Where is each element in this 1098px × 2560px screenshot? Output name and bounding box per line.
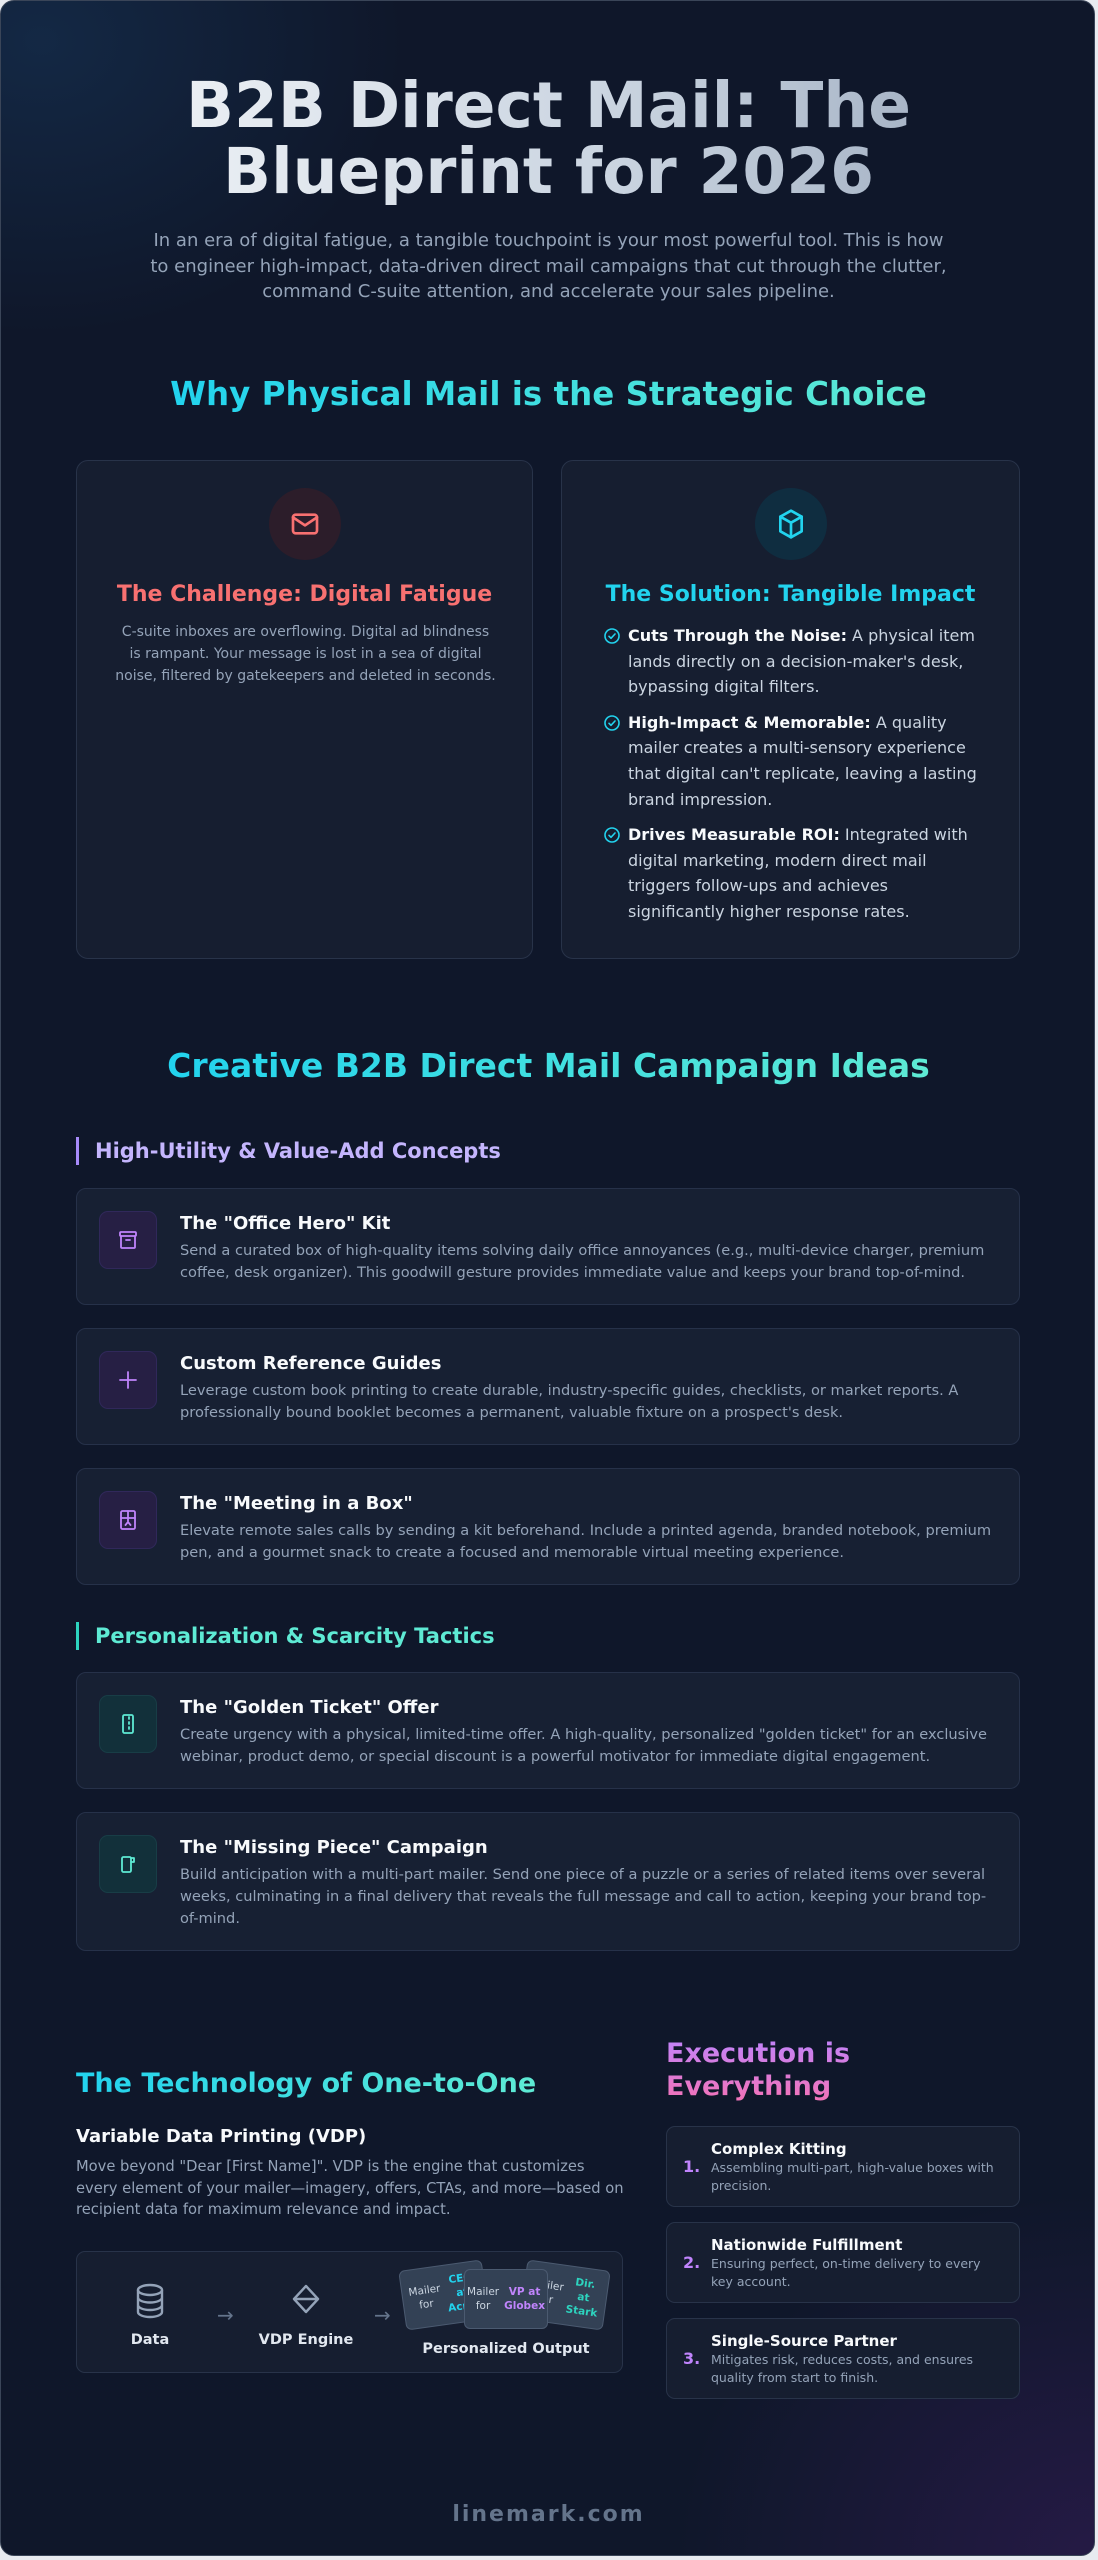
- solution title: The Solution: Tangible Impact: [606, 582, 975, 607]
- vdp text: every element of your mailer—imagery, offers, CTAs, and more—based on: [76, 2180, 624, 2196]
- execution card 2: Nationwide Fulfillment: [711, 2236, 902, 2254]
- item: roi: triggers follow-ups and achieves: [628, 876, 888, 895]
- execution card 1: Complex Kitting: [711, 2140, 847, 2158]
- mailer card: stark: for: [538, 2292, 554, 2306]
- label: data: Data: [131, 2332, 169, 2348]
- solution list: [604, 626, 977, 921]
- execution card 2: Ensuring perfect, on-time delivery to every key account.: [711, 2256, 981, 2289]
- challenge text: [115, 624, 496, 684]
- mailer card: globex: for: [476, 2300, 490, 2312]
- card: golden ticket: Create urgency with a physical, limited-time offer. A high-quality, personalized "golden ticket" for an exclusive webinar, product demo, or special discount is a powerful motivator for immediate digital engagement.: [180, 1726, 987, 1765]
- card: office hero: [76, 1188, 1020, 1305]
- execution card 3: [666, 2318, 1020, 2399]
- heading: creative ideas: Creative B2B Direct Mail Campaign Ideas: [167, 1046, 930, 1085]
- card: missing piece: [76, 1812, 1020, 1951]
- arrow 2: →: [374, 2303, 391, 2327]
- mailer card: stark: Mailer: [531, 2277, 564, 2294]
- icon: ticket: [99, 1695, 157, 1753]
- title: B2B Direct Mail: The: [186, 69, 911, 142]
- icon: cube: [755, 488, 827, 560]
- mailer card: acme: [398, 2259, 490, 2331]
- mailer card: globex: Mailer: [467, 2286, 499, 2298]
- card: reference guides: Leverage custom book printing to create durable, industry-specific guides, checklists, or market reports. A professionally bound booklet becomes a permanent, valuable fixture on a prospect's desk.: [180, 1382, 958, 1421]
- execution card 1: 1.: [683, 2157, 700, 2176]
- mailer card: stark: [519, 2259, 611, 2331]
- item: roi: Drives Measurable ROI: Integrated with: [628, 825, 968, 844]
- item: roi: digital marketing, modern direct mail: [628, 851, 927, 870]
- item: high impact: brand impression.: [628, 790, 772, 809]
- mailer card: acme: at: [456, 2286, 469, 2299]
- challenge title: The Challenge: Digital Fatigue: [117, 582, 492, 607]
- title: [1, 73, 1096, 205]
- subtitle: to engineer high-impact, data-driven direct mail campaigns that cut through the clutter,: [150, 256, 947, 276]
- label: personalized output: Personalized Output: [422, 2341, 590, 2357]
- icon: database: [136, 2284, 164, 2318]
- card: meeting in a box: [76, 1468, 1020, 1585]
- mailer card: globex: VP at: [509, 2286, 540, 2298]
- icon: plus: [99, 1351, 157, 1409]
- mailer card: globex: [464, 2269, 548, 2329]
- challenge text: is rampant. Your message is lost in a sea of digital: [130, 646, 482, 662]
- panel: solution: [561, 460, 1020, 959]
- icon: envelope: [269, 488, 341, 560]
- subtitle: In an era of digital fatigue, a tangible touchpoint is your most powerful tool. This is how: [153, 230, 944, 251]
- vdp text: Move beyond "Dear [First Name]". VDP is the engine that customizes: [76, 2158, 585, 2175]
- subheading: high utility: High-Utility & Value-Add Concepts: [95, 1139, 501, 1163]
- mailer card: acme: for: [418, 2298, 434, 2311]
- item: cuts through noise: [604, 626, 975, 696]
- card: office hero: The "Office Hero" Kit: [180, 1213, 390, 1234]
- subtitle: command C-suite attention, and accelerate your sales pipeline.: [262, 281, 835, 302]
- card: meeting in a box: The "Meeting in a Box": [180, 1493, 413, 1514]
- card: office hero: Send a curated box of high-quality items solving daily office annoyances (e.g., multi-device charger, premium coffee, desk organizer). This goodwill gesture provides immediate value and keeps your brand top-of-mind.: [180, 1242, 984, 1281]
- card: golden ticket: [76, 1672, 1020, 1789]
- heading: execution: Execution is: [666, 2038, 850, 2069]
- subheading: personalization: Personalization & Scarcity Tactics: [95, 1624, 495, 1648]
- heading: why physical mail: Why Physical Mail is the Strategic Choice: [170, 375, 927, 413]
- item: high impact: High-Impact & Memorable: A quality: [628, 713, 947, 732]
- mailer card: acme: Mailer: [408, 2282, 441, 2299]
- heading: execution: Everything: [666, 2071, 831, 2102]
- diagram: vdp flow: [76, 2251, 623, 2373]
- mailer card: stark: Dir.: [575, 2276, 596, 2291]
- item: high impact: mailer creates a multi-sensory experience: [628, 738, 966, 757]
- challenge text: noise, filtered by gatekeepers and deleted in seconds.: [115, 668, 496, 684]
- execution card 1: Assembling multi-part, high-value boxes with precision.: [711, 2160, 994, 2193]
- subtitle: [150, 230, 947, 302]
- challenge text: C-suite inboxes are overflowing. Digital ad blindness: [122, 624, 489, 640]
- item: cuts through noise: bypassing digital filters.: [628, 677, 820, 696]
- mailer card: stark: Stark: [565, 2303, 598, 2320]
- card: reference guides: [76, 1328, 1020, 1445]
- execution card 3: Single-Source Partner: [711, 2332, 897, 2350]
- execution card 3: Mitigates risk, reduces costs, and ensures quality from start to finish.: [711, 2352, 973, 2385]
- panel: challenge: [76, 460, 533, 959]
- execution card 2: [666, 2222, 1020, 2303]
- execution card 1: [666, 2126, 1020, 2207]
- item: high impact: [604, 713, 977, 809]
- mailer card: stark: at: [577, 2291, 590, 2304]
- icon: puzzle piece: [99, 1835, 157, 1893]
- vdp text: [76, 2158, 624, 2218]
- icon: box: [99, 1211, 157, 1269]
- item: roi: significantly higher response rates.: [628, 902, 910, 921]
- item: high impact: that digital can't replicate, leaving a lasting: [628, 764, 977, 783]
- heading: technology: The Technology of One-to-One: [76, 2068, 536, 2099]
- heading: execution: [666, 2037, 850, 2103]
- mailer card: globex: Globex: [504, 2300, 545, 2312]
- item: cuts through noise: lands directly on a decision-maker's desk,: [628, 652, 963, 671]
- execution card 3: 3.: [683, 2349, 700, 2368]
- icon: kit: [99, 1491, 157, 1549]
- card: meeting in a box: Elevate remote sales calls by sending a kit beforehand. Include a printed agenda, branded notebook, premium pen, and a gourmet snack to create a focused and memorable virtual meeting experience.: [180, 1522, 991, 1561]
- card: missing piece: Build anticipation with a multi-part mailer. Send one piece of a puzzle or a series of related items over several weeks, culminating in a final delivery that reveals the full message and call to action, keeping your brand top-of-mind.: [180, 1866, 986, 1927]
- card: missing piece: The "Missing Piece" Campaign: [180, 1837, 488, 1858]
- mailer card: acme: CEO: [448, 2271, 473, 2286]
- vdp subheading: Variable Data Printing (VDP): [76, 2126, 366, 2147]
- footer: linemark.com: [452, 2502, 645, 2527]
- card: reference guides: Custom Reference Guides: [180, 1353, 441, 1374]
- icon: diamond engine: [292, 2284, 320, 2314]
- title: Blueprint for 2026: [223, 135, 874, 208]
- card: golden ticket: The "Golden Ticket" Offer: [180, 1697, 438, 1718]
- execution card 2: 2.: [683, 2253, 700, 2272]
- label: vdp engine: VDP Engine: [259, 2332, 353, 2348]
- mailer card: acme: Acme: [447, 2298, 481, 2314]
- item: roi: [604, 825, 968, 921]
- arrow 1: →: [217, 2303, 234, 2327]
- item: cuts through noise: Cuts Through the Noise: A physical item: [628, 626, 975, 645]
- vdp text: recipient data for maximum relevance and impact.: [76, 2201, 451, 2218]
